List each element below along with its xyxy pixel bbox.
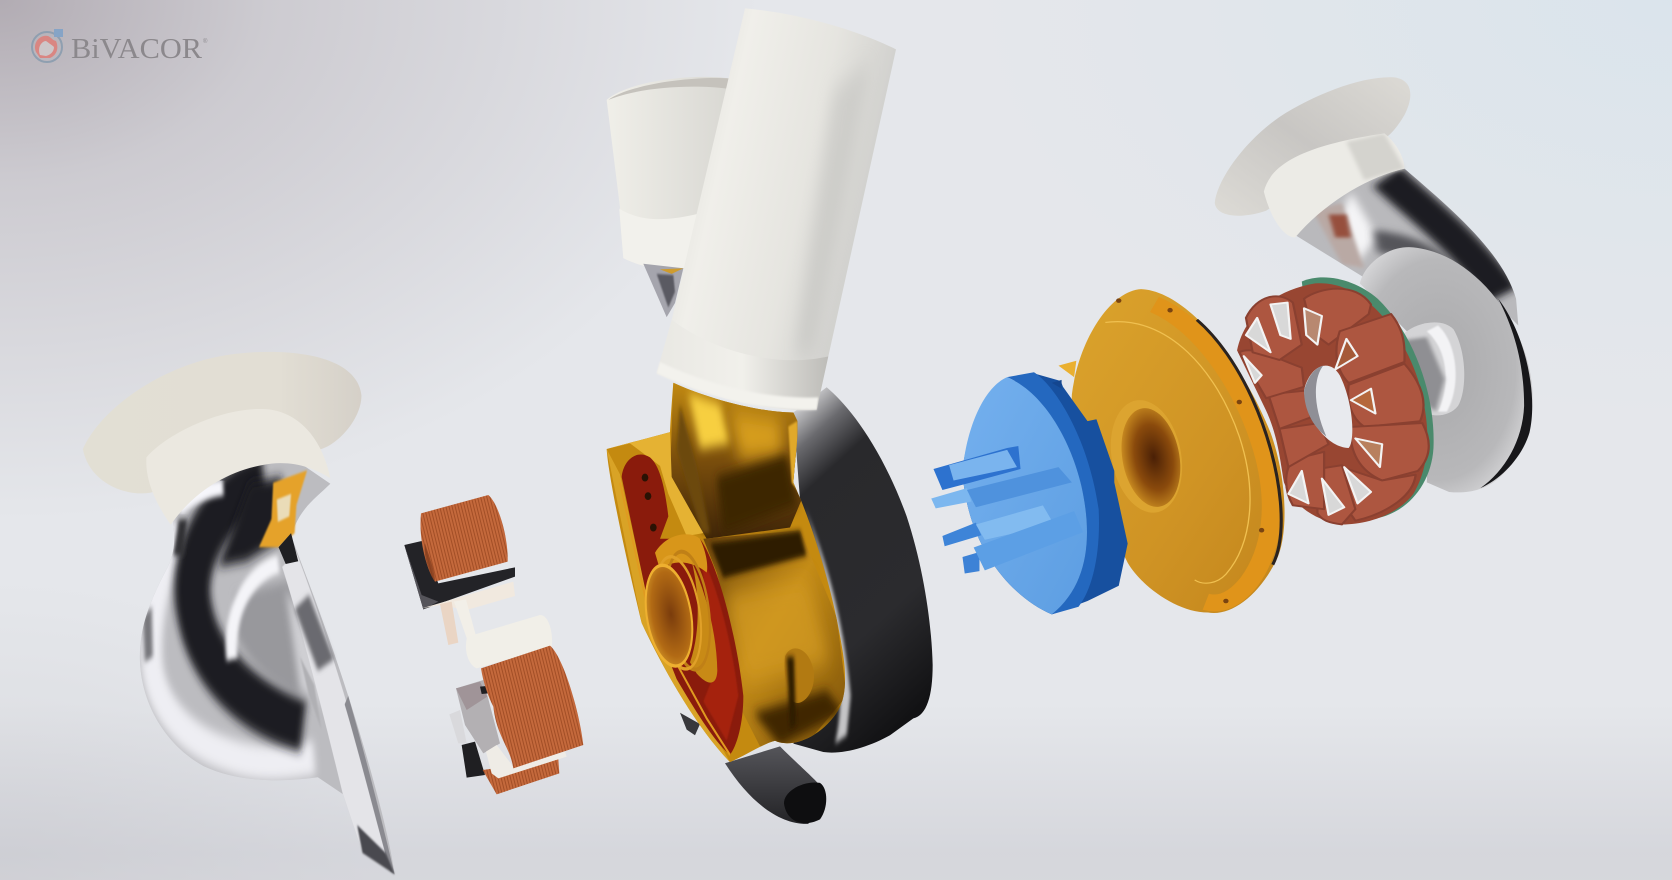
red interior bbox=[620, 455, 743, 755]
fastener boss bbox=[785, 648, 814, 730]
flange plate edge bbox=[282, 553, 395, 874]
flange face bbox=[607, 432, 730, 762]
coil blocks bbox=[1239, 289, 1429, 524]
central hole bbox=[1304, 366, 1352, 448]
logo: BiVACOR bbox=[32, 29, 208, 65]
gold bearing plate bbox=[1058, 289, 1285, 613]
rear white tube bbox=[607, 77, 733, 269]
upper black plate bbox=[404, 541, 515, 609]
white cuff bbox=[1264, 133, 1404, 237]
orange reflection bbox=[259, 470, 307, 564]
black wheel bbox=[793, 387, 933, 753]
right elbow bbox=[1293, 169, 1518, 326]
back disc bbox=[1360, 247, 1533, 492]
lower body bbox=[703, 530, 847, 752]
white flange bbox=[1215, 77, 1410, 216]
logo: BiVACOR: ® bbox=[203, 38, 208, 45]
gold plate bore bbox=[1103, 396, 1190, 517]
lower bracket blocks bbox=[449, 680, 567, 794]
flange disc bbox=[83, 352, 361, 493]
rear silver neck bbox=[643, 264, 683, 317]
central pump assembly bbox=[607, 8, 933, 824]
stator coil ring bbox=[1237, 283, 1429, 524]
blue pins bbox=[931, 446, 1083, 573]
silver body bbox=[140, 463, 395, 874]
upper bracket and pins bbox=[422, 582, 515, 645]
silver pole shoes bbox=[1244, 303, 1382, 515]
left silver elbow with flange bbox=[83, 352, 395, 874]
white cylinder bbox=[466, 615, 552, 668]
cuff bbox=[146, 409, 330, 525]
black hose bbox=[725, 746, 826, 824]
logo: BiVACOR: BiVACOR bbox=[71, 33, 203, 65]
neck bbox=[670, 382, 802, 539]
threaded port bbox=[637, 534, 717, 683]
gold housing bbox=[607, 382, 847, 762]
upper copper coil bbox=[420, 495, 508, 582]
stator ring PCB bbox=[1302, 277, 1434, 519]
electromagnet coils bbox=[404, 495, 583, 794]
lower copper coil bbox=[481, 646, 583, 768]
small dark fitting bbox=[680, 713, 700, 735]
blue connector disc bbox=[931, 372, 1128, 614]
front white tube bbox=[672, 8, 896, 361]
screw holes bbox=[642, 474, 657, 531]
right silver elbow, disc and cuff bbox=[931, 77, 1533, 614]
tube collar bbox=[657, 320, 828, 410]
silver hub bbox=[1400, 322, 1464, 415]
